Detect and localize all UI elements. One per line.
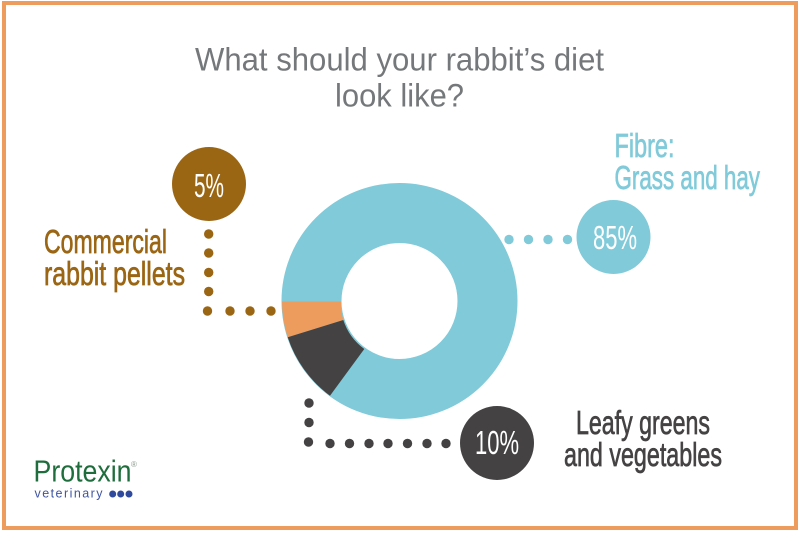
label: fibre, grass and hay [614,127,760,196]
segment: commercial pellets [282,302,343,337]
title [195,42,604,114]
callout: commercial pellets 5%: 5% [194,167,224,204]
logo: Protexin veterinary: veterinary [34,486,103,500]
label: commercial rabbit pellets: rabbit pellets [44,255,185,292]
callout: fibre 85% [504,200,650,274]
donut chart [282,213,488,396]
label: fibre, grass and hay: Fibre: [614,127,674,164]
label: leafy greens and vegetables: and vegetables [564,436,722,473]
callout: commercial pellets 5% [172,147,276,316]
label: leafy greens and vegetables: Leafy greens [576,404,710,441]
segment: leafy greens [288,320,364,396]
title: What should your rabbit’s diet [195,42,604,78]
label: leafy greens and vegetables [564,404,722,473]
callout: leafy greens 10% [304,398,534,480]
logo: Protexin veterinary: Protexin [34,454,132,488]
title: look like? [335,78,464,114]
logo: Protexin veterinary: ® [131,460,137,469]
logo: Protexin veterinary [34,454,137,500]
label: commercial rabbit pellets [44,223,185,292]
label: commercial rabbit pellets: Commercial [44,223,167,260]
callout: fibre 85%: 85% [593,219,637,256]
callout: leafy greens 10%: 10% [475,424,519,461]
